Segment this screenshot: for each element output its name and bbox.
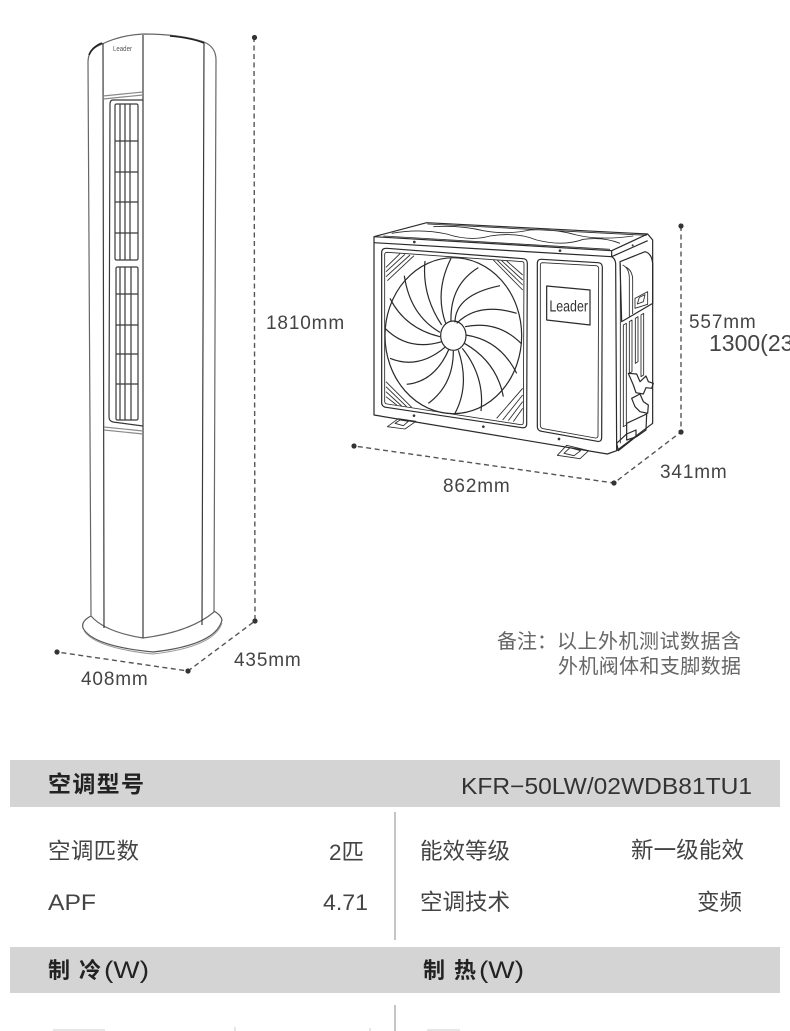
header bar: cooling and heating: 制 xyxy=(423,958,445,983)
foot left xyxy=(387,419,416,429)
fan panel xyxy=(382,248,527,428)
outdoor height label: 557mm xyxy=(689,312,757,333)
note: 外机阀体和支脚数据 xyxy=(558,655,741,678)
note: 以上外机测试数据含 xyxy=(557,630,741,653)
side slots xyxy=(620,263,644,443)
lower band xyxy=(104,427,143,434)
fan hub xyxy=(441,321,466,350)
spec: APF: APF xyxy=(48,890,96,915)
header bar: model: KFR−50LW/02WDB81TU1 xyxy=(461,773,752,799)
column divider upper xyxy=(394,812,396,940)
logo on tower: Leader xyxy=(113,44,132,53)
header bar: cooling and heating xyxy=(10,947,780,993)
spec: APF: 4.71 xyxy=(323,890,368,915)
spec: technology xyxy=(420,890,742,915)
spec: energy grade: 新一级能效 xyxy=(631,838,744,863)
spec: technology: 变频 xyxy=(697,890,742,915)
lower grille xyxy=(116,267,138,420)
spec: energy grade: 能效等级 xyxy=(420,839,510,864)
unit body xyxy=(374,223,653,454)
side cover xyxy=(620,252,653,322)
header bar: model: 空调型号 xyxy=(48,771,144,797)
spec: capacity: 2匹 xyxy=(329,840,364,865)
outdoor unit xyxy=(374,223,653,459)
spec: energy grade xyxy=(420,838,744,864)
dimension lines: tower xyxy=(54,35,258,674)
header bar: cooling and heating: 热 xyxy=(454,958,476,983)
corner hatching xyxy=(386,254,523,422)
spec: capacity xyxy=(48,839,364,865)
header bar: cooling and heating: 制 xyxy=(48,958,70,983)
spec: APF xyxy=(48,890,368,915)
valves xyxy=(617,373,653,451)
spec: capacity: 空调匹数 xyxy=(48,839,139,864)
spec: technology: 空调技术 xyxy=(420,890,510,915)
height label: 1810mm xyxy=(266,313,345,334)
grille frame xyxy=(109,100,143,426)
tower body xyxy=(88,34,216,638)
note xyxy=(497,630,741,678)
logo text: Leader xyxy=(549,298,589,315)
screws xyxy=(413,241,634,440)
depth label: 435mm xyxy=(234,650,302,671)
note: 备注： xyxy=(497,630,557,653)
nameplate panel xyxy=(537,259,602,441)
foot right xyxy=(557,445,589,459)
header bar: cooling and heating: 冷 xyxy=(79,958,101,983)
dimension lines: outdoor xyxy=(351,223,684,486)
fan rim and blades xyxy=(385,258,522,414)
top edges xyxy=(374,234,648,451)
tower vertical seams xyxy=(103,35,204,638)
width label: 408mm xyxy=(81,669,149,690)
header bar: cooling and heating: (W) xyxy=(479,957,524,984)
upper grille xyxy=(115,104,138,260)
indoor tower air conditioner xyxy=(83,34,222,654)
tower top arc xyxy=(89,36,204,55)
header bar: model xyxy=(10,760,780,807)
top wavy surface xyxy=(383,224,647,249)
outdoor width label: 862mm xyxy=(443,476,511,497)
column divider lower xyxy=(394,1005,396,1031)
logo plate xyxy=(547,286,590,325)
upper band xyxy=(103,92,143,99)
tower base xyxy=(83,611,222,654)
header bar: cooling and heating: (W) xyxy=(104,957,149,984)
outdoor depth label: 341mm xyxy=(660,462,728,483)
